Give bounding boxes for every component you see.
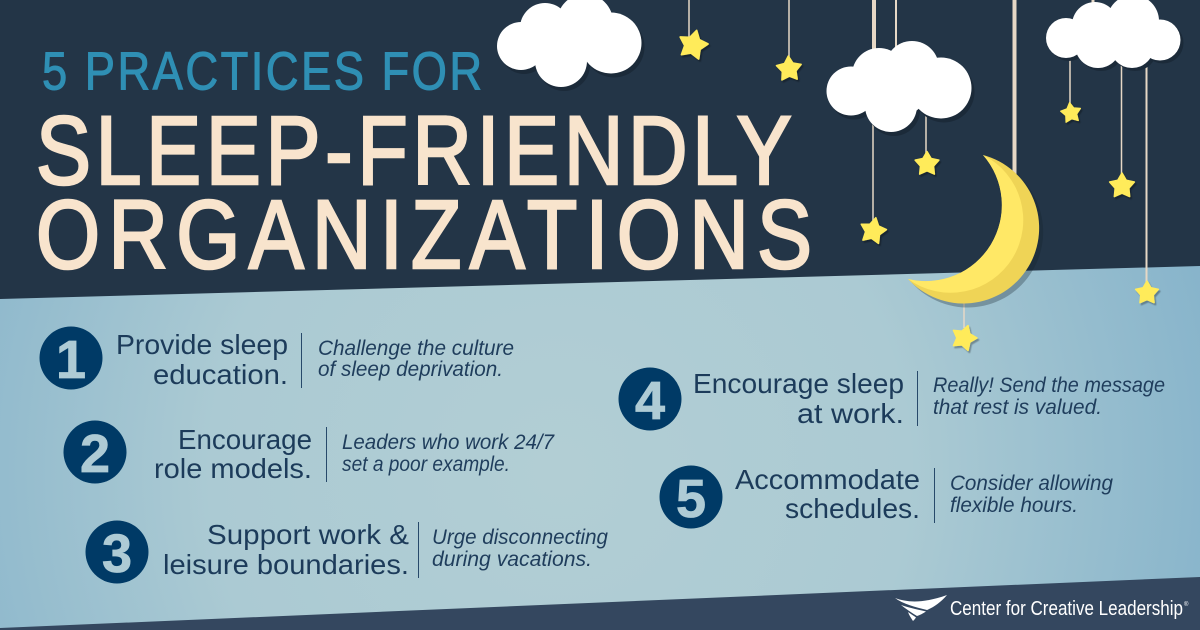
practice 4 (618, 368, 1165, 431)
icon: stars (676, 27, 1158, 352)
practice 2 heading: Encourage (178, 424, 312, 455)
title (36, 98, 812, 290)
number badge 2: 2 (80, 424, 110, 484)
practice 1 note: Challenge the culture (318, 337, 514, 360)
practice 5 heading (735, 464, 920, 524)
practice 5 (660, 464, 1113, 529)
practice 1 (40, 326, 514, 390)
practice 1 heading: education. (153, 359, 288, 390)
title: SLEEP-FRIENDLY (36, 98, 792, 206)
icon: crescent moon (908, 155, 1043, 307)
logo: Center for Creative Leadership: ® (1184, 601, 1189, 608)
logo: Center for Creative Leadership (895, 595, 1189, 621)
practice 4 note: that rest is valued. (933, 396, 1102, 419)
practice 4 note (933, 374, 1165, 419)
practice 2 note: set a poor example. (342, 453, 510, 476)
practice 5 heading: schedules. (785, 493, 920, 524)
number badge 2 (64, 420, 126, 484)
practice 4 heading: Encourage sleep (693, 368, 904, 399)
cloud: right (1046, 0, 1184, 71)
footer band (0, 577, 1200, 630)
practice 4 heading (693, 368, 904, 429)
cloud: left (497, 0, 644, 91)
practice 3 heading: leisure boundaries. (163, 549, 409, 580)
practice 1 note: of sleep deprivation. (318, 358, 503, 381)
number badge 4 (618, 368, 682, 431)
number badge 4: 4 (635, 371, 665, 431)
practice 5 note (950, 472, 1113, 517)
practice 1 note (318, 337, 514, 381)
practice 2 (64, 420, 555, 484)
practice 3 heading (163, 519, 409, 580)
practice 3 note: Urge disconnecting (432, 526, 608, 549)
practice 1 heading (116, 329, 288, 390)
number badge 5: 5 (676, 469, 706, 529)
practice 1 heading: Provide sleep (116, 329, 288, 360)
practice 5 note: flexible hours. (950, 494, 1078, 517)
practice 4 note: Really! Send the message (933, 374, 1165, 397)
number badge 1 (40, 326, 102, 390)
practice 2 note (342, 431, 555, 476)
icon: wing (895, 595, 947, 621)
practice 5 heading: Accommodate (735, 464, 920, 495)
number badge 3 (86, 520, 148, 584)
practice 4 heading: at work. (797, 398, 904, 429)
number badge 5 (660, 466, 722, 529)
light blue lower panel (0, 266, 1200, 630)
practice 5 note: Consider allowing (950, 472, 1113, 495)
heading: 5 practices for: 5 PRACTICES FOR (42, 41, 482, 101)
practice 3 note (432, 526, 608, 571)
practice 2 heading (154, 424, 312, 484)
cloud: middle (826, 41, 974, 136)
number badge 3: 3 (102, 524, 132, 584)
practice 2 note: Leaders who work 24/7 (342, 431, 555, 454)
practice 3 (86, 519, 608, 584)
practice 2 heading: role models. (154, 453, 312, 484)
title: ORGANIZATIONS (36, 182, 812, 290)
practice 3 heading: Support work & (207, 519, 409, 550)
practice 3 note: during vacations. (432, 548, 592, 571)
number badge 1: 1 (56, 330, 86, 390)
strings (689, 0, 1146, 328)
